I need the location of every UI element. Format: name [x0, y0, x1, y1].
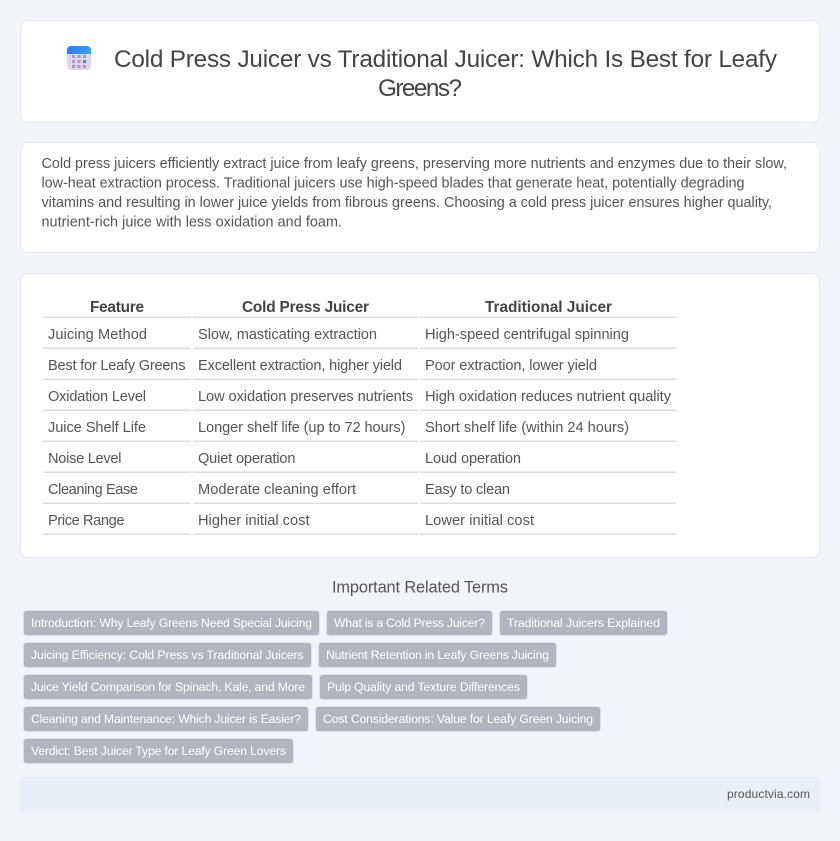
- table row: price range: Price Range: [48, 513, 124, 529]
- panel: header: [20, 20, 820, 122]
- tag: traditional juicers explained: [500, 610, 668, 636]
- table row: juice shelf life: Juice Shelf Life: [48, 420, 146, 436]
- tag: cost considerations: [316, 706, 600, 732]
- table row: best for leafy greens: Poor extraction, lower yield: [425, 358, 597, 374]
- table row: noise level: [43, 451, 676, 473]
- table row: price range: [43, 513, 676, 535]
- table row: cleaning ease: Easy to clean: [425, 482, 510, 498]
- tag: cost considerations: Cost Considerations: Value for Leafy Green Juicing: [323, 712, 593, 726]
- title: [114, 46, 778, 102]
- tag: traditional juicers explained: Traditional Juicers Explained: [507, 616, 660, 630]
- table row: best for leafy greens: Excellent extraction, higher yield: [198, 358, 402, 374]
- table row: noise level: Loud operation: [425, 451, 521, 467]
- table row: price range: Lower initial cost: [425, 513, 534, 529]
- tag: what is a cold press juicer: [326, 610, 492, 636]
- tag: what is a cold press juicer: What is a Cold Press Juicer?: [334, 616, 485, 630]
- text block: introduction paragraph: vitamins and resulting in lower juice yields from fibrous greens. Choosing a cold press juicer ensures higher quality,: [42, 195, 772, 211]
- tag: pulp quality: Pulp Quality and Texture Differences: [327, 680, 520, 694]
- table row: best for leafy greens: [43, 358, 676, 380]
- tag: juicing efficiency: [24, 642, 312, 668]
- table row: noise level: Noise Level: [48, 451, 122, 467]
- table row: best for leafy greens: Best for Leafy Greens: [48, 358, 186, 374]
- table row: juicing method: High-speed centrifugal spinning: [425, 327, 629, 343]
- heading: important related terms: Important Related Terms: [332, 578, 508, 596]
- tag: juice yield comparison: [24, 674, 312, 700]
- title: Greens?: [378, 75, 462, 102]
- table row: juicing method: [43, 327, 676, 349]
- tag cloud: related terms: [24, 610, 668, 764]
- text block: introduction paragraph: [42, 156, 787, 230]
- tag: introduction: [24, 610, 320, 636]
- tag: pulp quality: [320, 674, 528, 700]
- table row: juice shelf life: Short shelf life (within 24 hours): [425, 420, 629, 436]
- tag: introduction: Introduction: Why Leafy Greens Need Special Juicing: [31, 616, 312, 630]
- table row: oxidation level: Oxidation Level: [48, 389, 146, 405]
- title: Cold Press Juicer vs Traditional Juicer: Which Is Best for Leafy: [114, 46, 778, 73]
- panel: comparison table: [20, 274, 820, 558]
- table header row: Cold Press Juicer: [242, 299, 369, 316]
- table row: oxidation level: High oxidation reduces nutrient quality: [425, 389, 672, 405]
- table row: juice shelf life: Longer shelf life (up to 72 hours): [198, 420, 406, 436]
- tag: nutrient retention: Nutrient Retention in Leafy Greens Juicing: [326, 648, 549, 662]
- text block: introduction paragraph: low-heat extraction process. Traditional juicers use high-speed blades that generate heat, potentially degrading: [42, 176, 744, 192]
- table row: juicing method: Juicing Method: [48, 327, 147, 343]
- table row: price range: Higher initial cost: [198, 513, 310, 529]
- table row: noise level: Quiet operation: [198, 451, 296, 467]
- table row: cleaning ease: Cleaning Ease: [48, 482, 138, 498]
- table row: juicing method: Slow, masticating extraction: [198, 327, 377, 343]
- table row: oxidation level: [43, 389, 676, 411]
- table row: cleaning ease: Moderate cleaning effort: [198, 482, 356, 498]
- icon: calendar: [67, 46, 91, 70]
- tag: cleaning and maintenance: [24, 706, 308, 732]
- footer source text: productvia.com: [727, 787, 810, 801]
- tag: verdict: [24, 738, 294, 764]
- tag: verdict: Verdict: Best Juicer Type for Leafy Green Lovers: [31, 744, 286, 758]
- footer: [20, 777, 820, 811]
- table header row: Traditional Juicer: [485, 299, 612, 316]
- table row: juice shelf life: [43, 420, 676, 442]
- table row: oxidation level: Low oxidation preserves nutrients: [198, 389, 413, 405]
- tag: cleaning and maintenance: Cleaning and Maintenance: Which Juicer is Easier?: [31, 712, 301, 726]
- table header row: Feature: [90, 299, 144, 316]
- tag: juice yield comparison: Juice Yield Comparison for Spinach, Kale, and More: [31, 680, 305, 694]
- text block: introduction paragraph: nutrient-rich juice with less oxidation and foam.: [42, 214, 342, 230]
- panel: introduction: [20, 142, 820, 252]
- text block: introduction paragraph: Cold press juicers efficiently extract juice from leafy greens, preserving more nutrients and enzymes due to their slow,: [42, 156, 787, 172]
- table header row: [43, 299, 676, 318]
- tag: nutrient retention: [318, 642, 556, 668]
- table row: cleaning ease: [43, 482, 676, 504]
- tag: juicing efficiency: Juicing Efficiency: Cold Press vs Traditional Juicers: [31, 648, 304, 662]
